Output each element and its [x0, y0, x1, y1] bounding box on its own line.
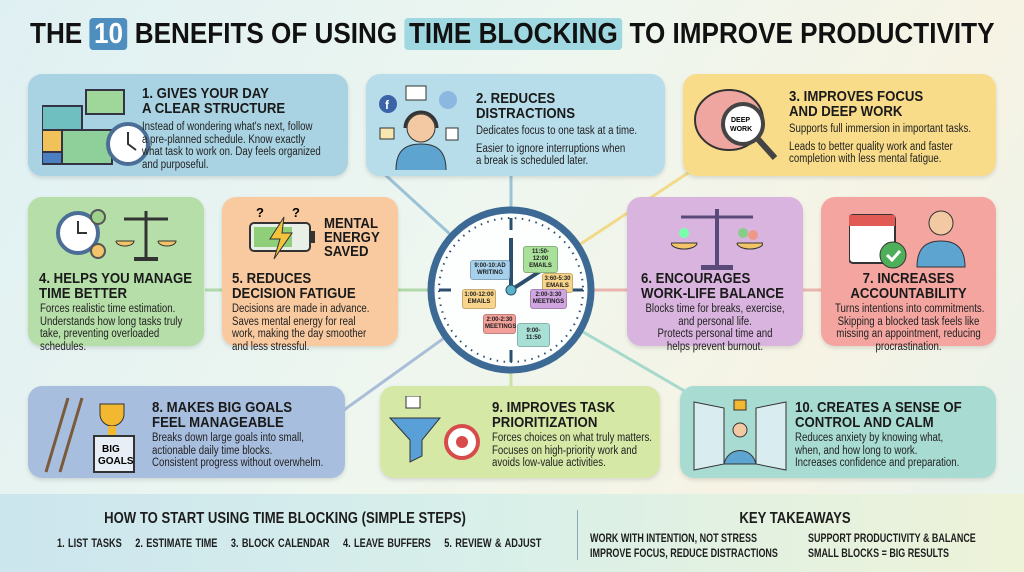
heading: TIME BETTER — [39, 285, 127, 302]
list: WORK WITH INTENTION, NOT STRESS — [590, 533, 757, 545]
icon: battery: ? — [292, 205, 300, 220]
clock: EMAILS — [468, 299, 490, 305]
panel: 10 control and calm — [680, 386, 996, 478]
text: Supports full immersion in important tasks. — [789, 123, 971, 135]
icon: calendar and person — [849, 210, 966, 268]
heading — [850, 270, 967, 302]
bottom band — [0, 494, 1024, 572]
icon: funnel target — [389, 396, 480, 463]
text: Breaks down large goals into small, — [152, 432, 304, 444]
section: how to start — [57, 510, 542, 550]
section: key takeaways: SUPPORT PRODUCTIVITY & BALANCE — [808, 533, 976, 545]
clock: 11:50-12:00 — [532, 249, 549, 262]
heading: 3. IMPROVES FOCUS — [789, 88, 923, 105]
label: mental energy saved — [324, 215, 380, 260]
text: Dedicates focus to one task at a time. — [476, 125, 637, 137]
text — [835, 303, 984, 352]
text: missing an appointment, reducing — [836, 328, 981, 340]
icon: brain magnifier — [694, 89, 778, 160]
heading: DISTRACTIONS — [476, 105, 575, 122]
panel: 5 decision fatigue — [222, 197, 398, 346]
clock: WRITING — [477, 270, 503, 276]
text — [789, 123, 971, 165]
heading: DECISION FATIGUE — [232, 285, 356, 302]
text: actionable daily time blocks. — [152, 444, 272, 456]
label: mental energy saved: SAVED — [324, 243, 369, 260]
text: Forces realistic time estimation. — [40, 303, 175, 315]
section: key takeaways: SMALL BLOCKS = BIG RESULTS — [808, 548, 949, 560]
panel: 3 focus — [683, 74, 996, 176]
text: and purposeful. — [142, 158, 209, 170]
heading — [795, 399, 962, 431]
clock: 2:00-3:30 — [535, 292, 562, 298]
text — [142, 121, 321, 170]
text — [232, 303, 369, 352]
list — [590, 533, 778, 560]
text: avoids low-value activities. — [492, 457, 606, 469]
clock: 3:60-5:30 — [544, 276, 570, 282]
heading: A CLEAR STRUCTURE — [142, 100, 285, 117]
panel: 7 accountability — [821, 197, 996, 346]
text: completion with less mental fatigue. — [789, 153, 941, 165]
heading: CONTROL AND CALM — [795, 414, 934, 431]
icon: clock gears scale — [56, 209, 176, 261]
panel: 1 structure — [28, 74, 348, 176]
text: Saves mental energy for real — [232, 316, 356, 328]
text: Protects personal time and — [658, 328, 772, 340]
text: take, preventing overloaded — [40, 328, 159, 340]
text: Increases confidence and preparation. — [795, 457, 959, 469]
steps: 1. LIST TASKS 2. ESTIMATE TIME 3. BLOCK CALENDAR 4. LEAVE BUFFERS 5. REVIEW & ADJUST — [57, 538, 541, 550]
panel: 6 work-life balance — [627, 197, 803, 346]
clock: MEETINGS — [533, 299, 564, 305]
heading: 10. CREATES A SENSE OF — [795, 399, 962, 416]
text: Easier to ignore interruptions when — [476, 142, 625, 154]
icon: brain magnifier: WORK — [730, 126, 752, 133]
heading: 6. ENCOURAGES — [641, 270, 750, 287]
text: Blocks time for breaks, exercise, — [645, 303, 785, 315]
heading — [39, 270, 192, 302]
text: Forces choices on what truly matters. — [492, 432, 652, 444]
heading — [142, 85, 285, 117]
heading — [641, 270, 784, 302]
text: schedules. — [40, 340, 86, 352]
clock: MEETINGS — [485, 324, 516, 330]
icon: blocks and clock — [42, 89, 150, 166]
text — [476, 125, 637, 166]
panel: 2 distractions — [366, 74, 665, 176]
text: Instead of wondering what's next, follow — [142, 121, 312, 133]
heading — [789, 88, 923, 120]
heading: 7. INCREASES — [863, 270, 954, 287]
icon: headphones person — [379, 86, 458, 170]
heading: WORK-LIFE BALANCE — [641, 285, 784, 302]
heading — [476, 90, 575, 122]
section: key takeaways — [590, 510, 976, 560]
text: a pre-planned schedule. Know exactly — [142, 134, 305, 146]
clock: 9:00-10:AD — [474, 263, 506, 269]
list: IMPROVE FOCUS, REDUCE DISTRACTIONS — [590, 548, 778, 560]
heading: 5. REDUCES — [232, 270, 311, 287]
text: when, and how long to work. — [795, 444, 917, 456]
icon: ladder trophy: BIG — [102, 444, 120, 455]
heading: PRIORITIZATION — [492, 414, 597, 431]
text: and personal life. — [678, 316, 752, 328]
heading — [232, 270, 356, 302]
icon: brain magnifier: DEEP — [731, 117, 750, 124]
text: Skipping a blocked task feels like — [838, 316, 979, 328]
text: Focuses on high-priority work and — [492, 444, 637, 456]
heading: 2. REDUCES — [476, 90, 555, 107]
text — [152, 432, 323, 469]
icon: battery — [249, 205, 315, 260]
text: helps prevent burnout. — [667, 340, 763, 352]
heading: 4. HELPS YOU MANAGE — [39, 270, 192, 287]
clock — [428, 206, 594, 374]
heading — [152, 399, 292, 431]
text: Consistent progress without overwhelm. — [152, 457, 323, 469]
text — [492, 432, 652, 469]
icon: meditating person — [694, 400, 786, 471]
clock: 2:00-2:30 — [486, 317, 512, 323]
text: Reduces anxiety by knowing what, — [795, 432, 943, 444]
text — [645, 303, 785, 352]
heading: HOW TO START USING TIME BLOCKING (SIMPLE STEPS) — [104, 510, 466, 527]
icon: ladder trophy — [44, 398, 135, 473]
heading: KEY TAKEAWAYS — [739, 510, 851, 527]
icon: ladder trophy: GOALS — [98, 456, 134, 467]
heading: 8. MAKES BIG GOALS — [152, 399, 292, 416]
text: work, making the day smoother — [232, 328, 366, 340]
label: mental energy saved: ENERGY — [324, 229, 380, 246]
clock: 1:00-12:00 — [464, 292, 494, 298]
text: Turns intentions into commitments. — [835, 303, 984, 315]
text: Leads to better quality work and faster — [789, 140, 953, 152]
clock: EMAILS — [529, 263, 552, 269]
panel: 8 big goals — [28, 386, 345, 478]
icon: battery: ? — [256, 205, 264, 220]
text: a break is scheduled later. — [476, 154, 588, 166]
clock: EMAILS — [546, 283, 569, 289]
heading: 1. GIVES YOUR DAY — [142, 85, 269, 102]
text — [795, 432, 959, 469]
text: Understands how long tasks truly — [40, 316, 182, 328]
heading — [492, 399, 615, 431]
heading: ACCOUNTABILITY — [850, 285, 967, 302]
heading: FEEL MANAGEABLE — [152, 414, 284, 431]
heading: AND DEEP WORK — [789, 103, 902, 120]
text: procrastination. — [875, 340, 942, 352]
panel: 4 manage time — [28, 197, 204, 346]
text: what task to work on. Day feels organized — [142, 146, 321, 158]
icon: headphones person: f — [385, 98, 390, 112]
label: mental energy saved: MENTAL — [324, 215, 378, 232]
icon: balance scale — [671, 209, 763, 270]
text: and less stressful. — [232, 340, 309, 352]
title: THE 10 BENEFITS OF USING TIME BLOCKING TO IMPROVE PRODUCTIVITY — [30, 18, 994, 50]
text: Decisions are made in advance. — [232, 303, 369, 315]
heading: 9. IMPROVES TASK — [492, 399, 615, 416]
text — [40, 303, 182, 352]
clock: 9:00-11:50 — [526, 328, 541, 341]
panel: 9 prioritization — [380, 386, 660, 478]
